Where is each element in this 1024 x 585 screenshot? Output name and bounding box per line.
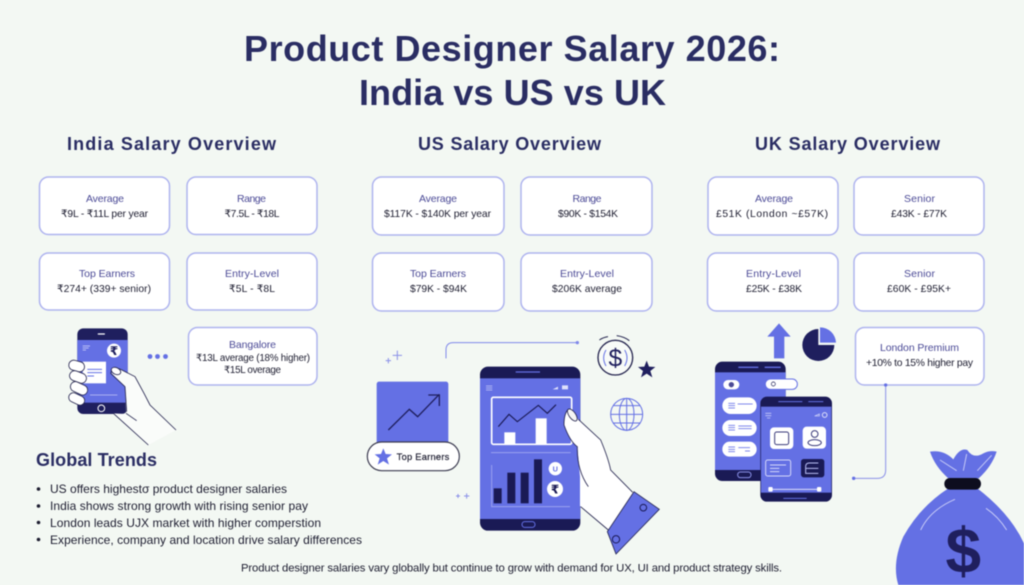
card: Bangalore: ₹13L average (18% higher) xyxy=(196,353,310,364)
card: India entry-level: Entry-Level xyxy=(225,268,279,280)
heading: UK: UK Salary Overview xyxy=(755,134,941,154)
card: London premium: London Premium xyxy=(880,342,959,354)
illustration: centre tablet and growth xyxy=(367,336,659,554)
card: US average: Average xyxy=(419,193,457,205)
card: UK average: £51K (London ~£57K) xyxy=(716,209,828,220)
illustration: hand holding phone xyxy=(67,328,176,445)
card: London premium xyxy=(856,328,984,385)
icon: front phone xyxy=(760,397,832,502)
illustration: UK phones, arrow, pie, bag xyxy=(715,323,1024,585)
card: India average: Average xyxy=(86,193,124,205)
card: UK entry-level: Entry-Level xyxy=(746,268,801,280)
list: global trends bullets: London leads UJX market with higher comperstion xyxy=(50,516,321,530)
illustration: centre tablet and growth: U xyxy=(553,464,558,473)
card: UK senior upper: £60K - £95K+ xyxy=(887,284,951,295)
card: Bangalore: Bangalore xyxy=(229,339,276,351)
card: US range: $90K - $154K xyxy=(558,209,618,220)
list: global trends bullets: US offers highestσ product designer salaries xyxy=(50,482,287,496)
icon: pie chart xyxy=(802,327,836,361)
panel: US cards xyxy=(372,177,652,311)
card: US top earners: $79K - $94K xyxy=(410,284,467,295)
heading: India: India Salary Overview xyxy=(67,134,277,154)
title: Product Designer Salary 2026: xyxy=(244,28,780,69)
card: US range: Range xyxy=(572,193,602,205)
list: global trends bullets xyxy=(37,482,362,547)
icon: money bag xyxy=(896,450,1024,585)
card: India range: ₹7.5L - ₹18L xyxy=(224,209,280,220)
icon: up arrow xyxy=(767,323,791,358)
card: UK senior: £43K - £77K xyxy=(891,209,947,220)
card: UK senior upper xyxy=(854,253,984,311)
card: Bangalore: ₹15L overage xyxy=(224,365,282,376)
card: UK average: Average xyxy=(755,193,793,205)
icon: three dots xyxy=(148,354,168,359)
heading: global trends: Global Trends xyxy=(36,450,157,470)
card: London premium: +10% to 15% higher pay xyxy=(866,358,974,369)
card: UK average xyxy=(708,177,838,235)
card: US top earners xyxy=(372,253,504,311)
card: India range: Range xyxy=(237,193,266,205)
icon: money bag: $ xyxy=(946,515,981,585)
card: India top earners: ₹274+ (339+ senior) xyxy=(57,284,151,295)
panel: UK cards xyxy=(708,177,984,385)
illustration: centre tablet and growth: $ xyxy=(608,346,622,373)
card: US entry-level: $206K average xyxy=(552,284,622,295)
title: India vs US vs UK xyxy=(359,72,666,113)
illustration: centre tablet and growth: Top Earners xyxy=(397,452,450,462)
card: India range xyxy=(187,177,317,234)
card: India top earners xyxy=(40,253,170,310)
card: UK senior upper: Senior xyxy=(904,268,936,280)
icon: back phone xyxy=(715,362,797,481)
card: US average: $117K - $140K per year xyxy=(384,209,492,220)
connector line xyxy=(852,383,887,480)
card: Bangalore xyxy=(188,328,317,385)
card: US entry-level xyxy=(521,253,652,311)
panel: India cards xyxy=(40,177,317,385)
card: UK senior xyxy=(854,177,984,235)
title xyxy=(244,28,780,113)
card: UK entry-level xyxy=(708,253,838,311)
card: India average: ₹9L - ₹11L per year xyxy=(61,209,149,220)
card: India entry-level xyxy=(187,253,317,310)
card: India entry-level: ₹5L - ₹8L xyxy=(229,284,275,295)
footer note: Product designer salaries vary globally but continue to grow with demand for UX, UI and product strategy skills. xyxy=(241,562,782,574)
list: global trends bullets: Experience, company and location drive salary differences xyxy=(50,533,362,547)
card: US top earners: Top Earners xyxy=(410,268,466,280)
illustration: hand holding phone: ₹ xyxy=(110,344,118,358)
list: global trends bullets: India shows strong growth with rising senior pay xyxy=(50,499,308,513)
heading: US: US Salary Overview xyxy=(418,134,602,154)
card: US average xyxy=(372,177,504,235)
card: India top earners: Top Earners xyxy=(79,268,135,280)
card: US range xyxy=(521,177,652,235)
card: India average xyxy=(40,177,170,234)
card: US entry-level: Entry-Level xyxy=(560,268,614,280)
card: UK senior: Senior xyxy=(904,193,936,205)
illustration: centre tablet and growth: ₹ xyxy=(551,482,559,496)
card: UK entry-level: £25K - £38K xyxy=(746,284,802,295)
